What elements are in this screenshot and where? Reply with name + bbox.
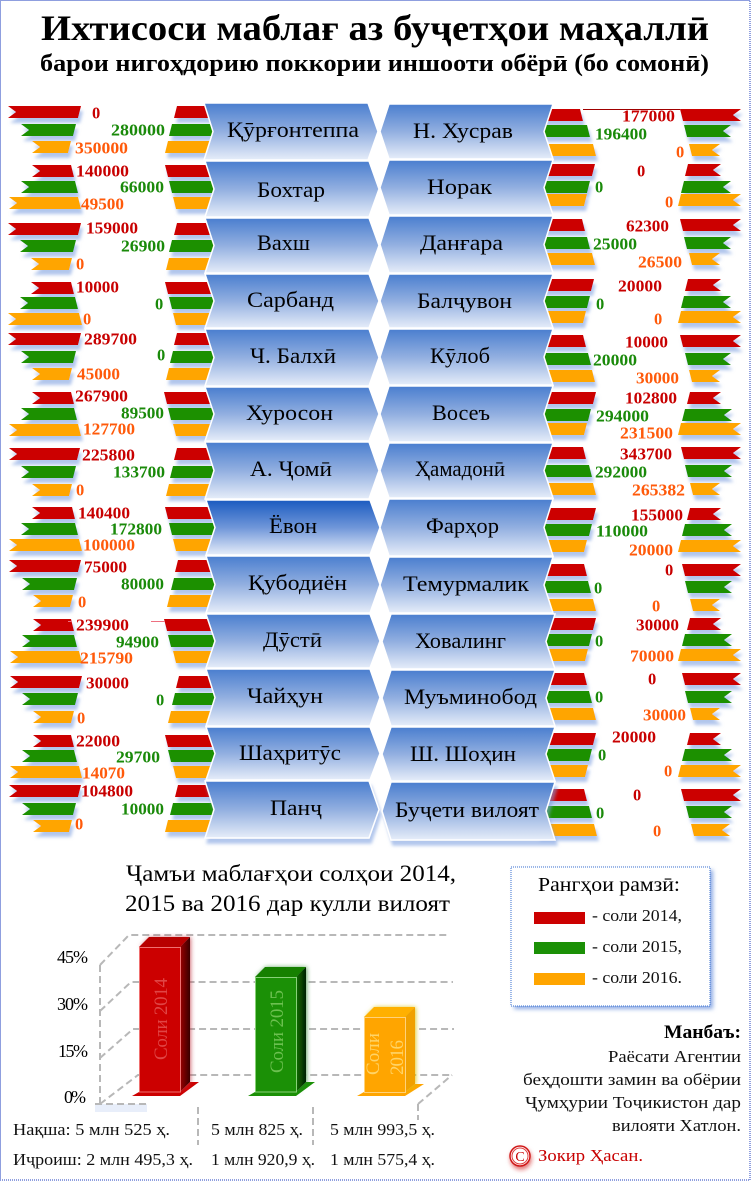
values: 239900 [76,616,129,634]
copyright: C [515,1150,525,1165]
chart heading: Ҷамъи маблағҳои солҳои 2014, [126,861,456,886]
district chevron: Восеъ [432,400,490,425]
left table row: Дӯстӣ [10,614,380,668]
subtitle: барои нигоҳдорию поккории иншооти обёрӣ (бо сомонӣ) [40,51,709,77]
district chevron: Шаҳритӯс [239,740,341,765]
chart heading [125,861,456,916]
values: 0 [156,690,164,710]
right table row: Фарҳор [380,499,741,560]
bars [10,735,218,778]
values [78,558,164,612]
bars [538,447,741,495]
bars [8,106,216,153]
values: 0 [83,310,91,328]
values: 0 [676,142,684,162]
district chevron: Вахш [257,230,310,255]
values: 0 [595,178,603,196]
values: 280000 [111,120,165,140]
values: 0 [76,254,84,274]
district chevron [206,614,380,668]
district chevron [382,670,555,726]
bars [538,279,741,323]
values: 225800 [82,446,135,464]
district chevron [380,104,553,159]
bars [9,785,217,832]
values [76,278,163,328]
values: 0 [596,294,604,314]
copyright: Зокир Ҳасан. [538,1146,643,1165]
values: 159000 [86,218,138,238]
values: 127700 [83,420,135,438]
values [593,216,682,272]
district chevron: Фарҳор [426,513,499,538]
values: 70000 [630,646,674,666]
values: 0 [653,822,661,840]
values: 20000 [629,540,673,560]
values: 102800 [625,388,677,408]
source: вилояти Хатлон. [612,1116,741,1135]
right table row: Муъминобод [382,670,741,726]
3D bar chart [57,935,454,1145]
values: 0 [594,578,602,598]
values: 20000 [612,728,656,746]
values: 20000 [618,276,662,296]
right table row: Буҷети вилоят [382,782,741,840]
values: 0 [648,670,656,688]
values: 177000 [622,106,675,126]
values [595,670,686,724]
district chevron [382,614,555,669]
values [76,732,160,782]
right table row: Кӯлоб [380,329,741,388]
values: 14070 [82,764,125,782]
left table row: Ёвон [9,500,380,555]
bars [9,507,218,551]
bars [9,392,217,436]
values [596,276,662,328]
values: 0 [637,162,645,180]
values: 350000 [75,138,128,158]
values: 215790 [80,648,133,668]
plan and execution figures: Иҷроиш: 2 млн 495,3 ҳ. [13,1150,193,1169]
values: 267900 [75,386,128,406]
values: 104800 [81,782,133,800]
values: 0 [77,708,85,728]
district chevron [206,727,380,780]
values: 0 [665,192,673,212]
district chevron [205,161,379,217]
values: 265382 [632,480,685,500]
district chevron [204,103,378,160]
district chevron: Чайҳун [247,683,323,708]
district chevron: А. Ҷомӣ [250,456,332,481]
district chevron: Темурмалик [403,571,529,596]
right table row: Темурмалик [380,557,741,616]
district chevron [205,218,379,273]
district chevron [205,781,379,838]
left table row: Чайҳун [10,669,380,728]
district chevron: Буҷети вилоят [395,797,539,822]
values: 0 [595,688,603,706]
plan and execution figures: 5 млн 825 ҳ. [211,1120,303,1139]
bar: 2016 [357,1007,424,1096]
bars [538,508,741,552]
chart heading: 2015 ва 2016 дар кулли вилоят [125,891,450,916]
left table row: А. Ҷомӣ [9,442,379,500]
legend item 2016 [534,968,682,987]
values: 0 [633,786,641,804]
values [595,444,685,500]
axis labels: 15% [58,1041,88,1061]
district chevron: Ҳамадонӣ [415,456,505,481]
district chevron: Ховалинг [415,628,506,653]
bars [538,618,741,661]
bars [8,223,217,270]
plan and execution figures: 5 млн 993,5 ҳ. [330,1120,435,1139]
district chevron [380,499,553,556]
right table row: Н. Хусрав [380,104,741,162]
left table row: Қубодиён [9,556,380,613]
values: 0 [75,814,83,834]
plan and execution figures: 1 млн 920,9 ҳ. [211,1150,315,1169]
values: 0 [596,804,604,822]
bars [538,335,741,382]
right table row: Восеъ [380,386,741,442]
copyright [510,1146,643,1166]
values: 343700 [620,444,672,464]
district chevron: Н. Хусрав [413,118,513,143]
values [595,106,684,162]
values: 0 [155,294,163,314]
values: 30000 [636,616,679,634]
district chevron [380,329,553,385]
right table row: Балҷувон [380,274,741,328]
legend item 2014: - соли 2014, [592,906,682,925]
bar: 2016: 2016 [387,1040,408,1075]
values [598,728,672,780]
values [78,504,162,554]
values [594,560,673,616]
values: 20000 [593,350,637,370]
district chevron: Ёвон [269,513,317,538]
district chevron [380,443,553,498]
left table row: Сарбанд [8,274,379,328]
district chevron: Кӯлоб [430,343,490,368]
values [596,388,677,442]
district chevron [380,386,553,442]
district chevron [205,387,379,441]
legend [511,867,710,1006]
values [75,104,165,158]
source [523,1022,741,1135]
left table row: Бохтар [9,161,379,217]
district chevron: Қубодиён [248,570,347,595]
values: 110000 [596,522,648,540]
values: 0 [652,596,660,616]
axis labels: 45% [57,947,88,967]
values [76,616,159,668]
legend item 2015 [534,937,682,956]
values: 10000 [121,800,164,818]
values [75,782,164,834]
values: 30000 [86,674,129,692]
values: 0 [157,346,165,364]
values: 49500 [81,194,124,214]
values [596,506,683,560]
district chevron [205,442,379,499]
bars [538,219,741,265]
legend: Рангҳои рамзӣ: [538,874,680,896]
district chevron [380,274,553,328]
district chevron: Балҷувон [417,288,512,313]
source: Раёсати Агентии [608,1047,741,1066]
source: Манбаъ: [664,1022,741,1043]
district chevron: Муъминобод [404,684,537,709]
values: 10000 [625,332,668,352]
legend item 2016: - соли 2016. [592,968,682,987]
values: 10000 [76,278,119,296]
values: 133700 [113,462,165,482]
left table row: Ч. Балхӣ [8,329,379,386]
values: 26900 [121,236,165,256]
values: 0 [595,632,603,650]
district chevron [380,557,553,613]
right table row: Ш. Шоҳин [382,727,741,781]
bars [538,733,741,777]
values [77,330,165,384]
source: Ҷумҳурии Тоҷикистон дар [525,1093,741,1112]
right table row: Норак [380,160,741,215]
left table row: Вахш [8,218,379,274]
title: Ихтисоси маблағ аз буҷетҳои маҳаллӣ [41,8,709,48]
bars [10,676,218,723]
left table row: Қӯрғонтеппа [8,103,378,160]
plan and execution figures: Нақша: 5 млн 525 ҳ. [13,1120,170,1139]
values: 80000 [121,574,164,594]
values [595,162,673,212]
values: 62300 [626,216,669,236]
district chevron [205,329,379,386]
bar: 2014: Соли 2014 [151,978,172,1060]
values: 155000 [631,506,683,524]
values [593,332,679,388]
bar: 2015: Соли 2015 [267,990,288,1073]
values: 0 [598,746,606,764]
source: беҳдошти замин ва обёрии [523,1070,741,1089]
bars [8,282,217,325]
district chevron [206,500,380,555]
values: 66000 [120,178,164,196]
values [76,162,164,214]
values: 45000 [77,364,120,384]
right table row: Ховалинг [382,614,741,669]
values: 0 [664,762,672,780]
values [76,218,165,274]
bars [538,164,741,206]
district chevron: Сарбанд [247,287,334,312]
bars [538,789,741,836]
values: 25000 [593,234,637,254]
bar: 2016: Соли [363,1033,384,1075]
values: 26500 [638,252,682,272]
bar: 2015 [248,967,315,1096]
values: 140400 [78,504,130,522]
values: 172800 [110,520,162,538]
bars [538,392,741,435]
values [595,616,679,666]
right table row: Ҳамадонӣ [380,443,741,500]
values [75,386,164,438]
bars [9,448,217,496]
values: 292000 [595,462,647,482]
values: 30000 [643,706,686,724]
district chevron: Ч. Балхӣ [250,343,336,368]
district chevron: Қӯрғонтеппа [227,117,359,142]
bars [8,333,217,380]
district chevron [382,782,555,840]
values: 0 [654,310,662,328]
values: 100000 [83,536,135,554]
values: 294000 [596,406,649,426]
values: 0 [665,560,673,580]
values: 75000 [84,558,127,576]
plan and execution figures: 1 млн 575,4 ҳ. [330,1150,435,1169]
values: 231500 [620,424,673,442]
values: 89500 [121,404,164,422]
legend item 2015: - соли 2015, [592,937,682,956]
district chevron: Хуросон [246,400,333,425]
axis labels [57,947,88,1107]
values: 289700 [84,330,137,348]
bars [538,109,741,156]
district chevron: Ш. Шоҳин [410,741,516,766]
values: 196400 [595,124,647,144]
district chevron [380,216,553,273]
district chevron: Панҷ [270,795,322,820]
left table row: Панҷ [9,781,379,838]
values: 30000 [636,368,679,388]
bars [9,560,218,607]
district chevron: Данғара [420,230,503,255]
values [596,786,661,840]
district chevron [382,727,555,781]
district chevron [205,274,379,328]
values: 0 [76,480,84,500]
values: 29700 [116,748,160,766]
left table row: Хуросон [9,386,379,441]
values: 0 [92,104,100,122]
values: 140000 [76,162,129,180]
district chevron: Дӯстӣ [263,627,322,652]
bars [10,619,218,663]
district chevron [206,556,380,613]
bars [9,165,217,209]
bars [538,673,741,720]
right table row: Данғара [380,216,741,273]
legend item 2014 [534,906,682,925]
values: 94900 [116,632,159,652]
district chevron [206,669,380,726]
bars [538,564,741,611]
left table row: Шаҳритӯс [10,727,380,782]
district chevron [380,160,553,215]
plan and execution figures [13,1120,435,1169]
axis labels: 30% [57,994,88,1014]
values: 0 [78,592,86,612]
values [76,446,165,500]
district chevron: Бохтар [257,177,325,202]
axis labels: 0% [64,1087,86,1107]
values [77,674,164,728]
bar: 2014 [132,937,199,1096]
values: 22000 [76,732,120,750]
district chevron: Норак [427,174,492,199]
